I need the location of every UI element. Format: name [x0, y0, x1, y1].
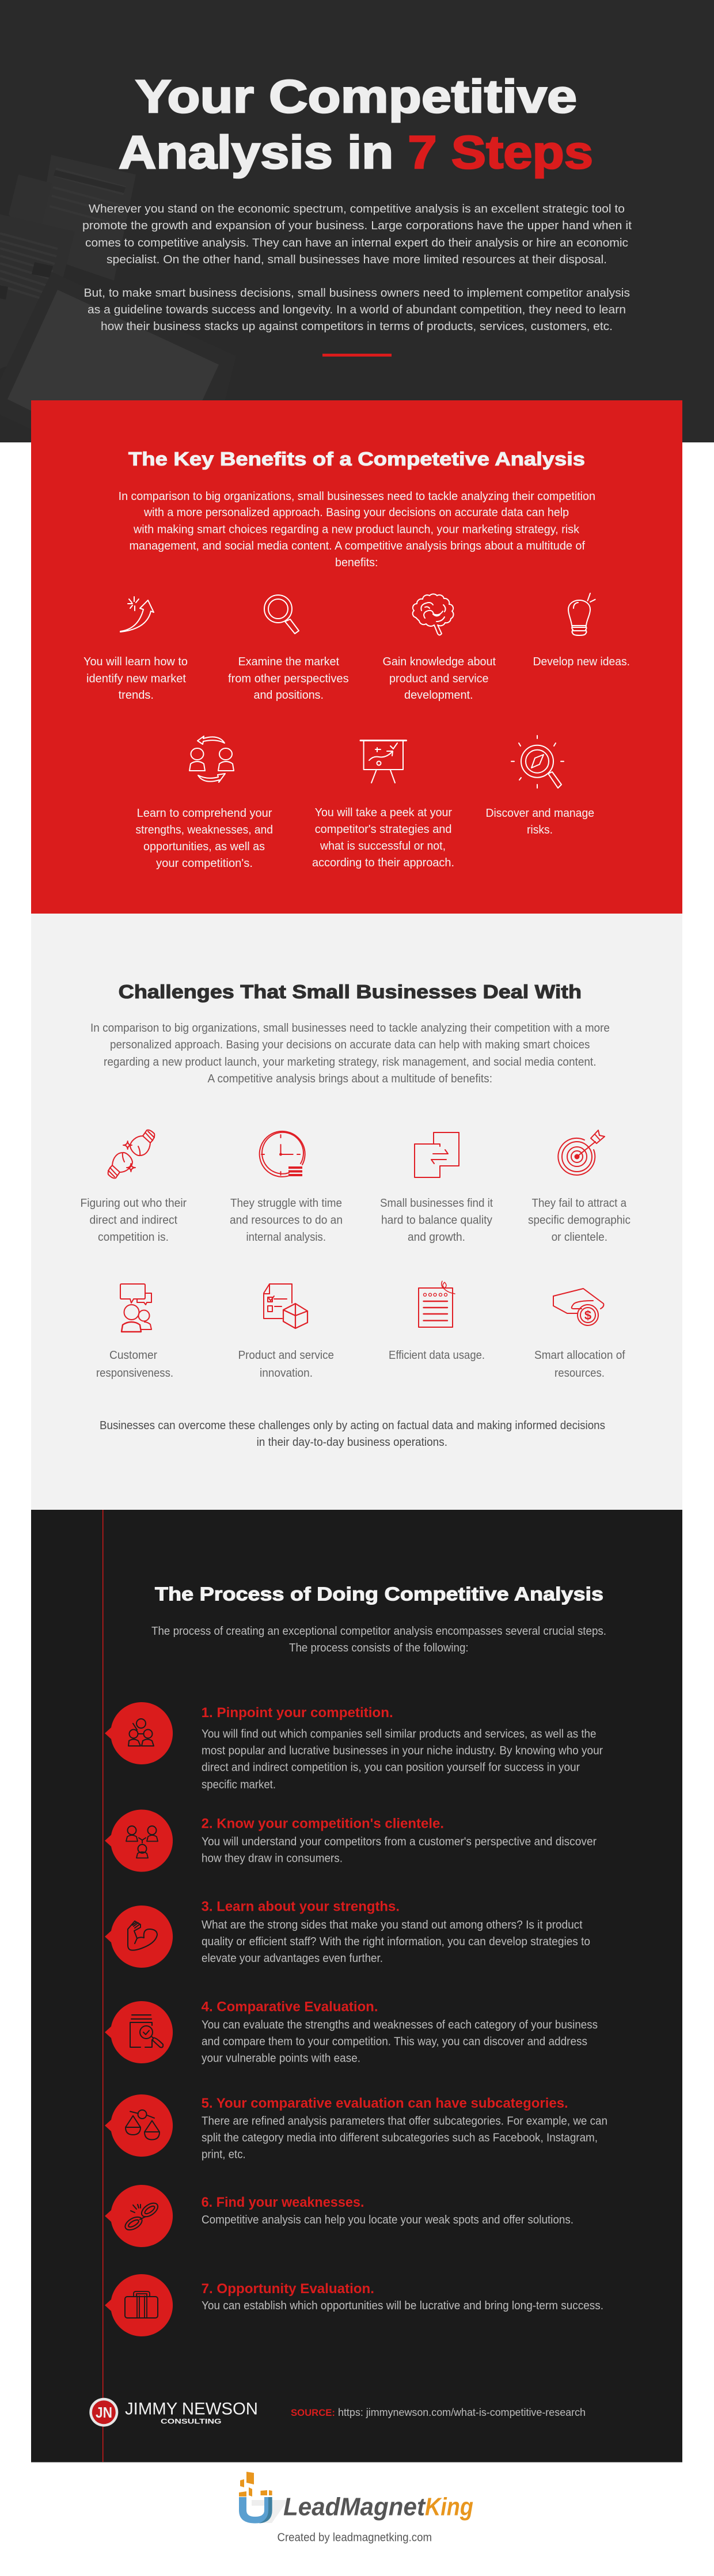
caption: peek	[312, 806, 454, 869]
icon: swapping documents	[415, 1132, 459, 1177]
source: https: jimmynewson.com/what-is-competitive-research	[338, 2407, 586, 2418]
step 7 text: 7. Opportunity Evaluation.	[202, 2281, 374, 2297]
caption: balance	[380, 1196, 493, 1244]
intro text	[82, 202, 632, 333]
caption: figuring out	[81, 1196, 187, 1244]
caption: balance: hard to balance quality	[381, 1213, 493, 1227]
closing text: in their day-to-day business operations.	[257, 1435, 447, 1449]
step 5 text: 5. Your comparative evaluation can have subcategories.	[202, 2096, 568, 2111]
title: Your Competitive	[135, 71, 577, 123]
intro text: promote the growth and expansion of your business. Large corporations have the upper hand when it	[82, 219, 632, 232]
icon: data sheet	[419, 1281, 455, 1327]
step 1 text: direct and indirect competition is, you can position yourself for success in your	[202, 1760, 580, 1774]
divider	[322, 354, 392, 357]
step 3 text: What are the strong sides that make you stand out among others? Is it product	[202, 1918, 583, 1931]
step 6 text: Competitive analysis can help you locate your weak spots and offer solutions.	[202, 2213, 574, 2226]
challenges intro text: In comparison to big organizations, small businesses need to tackle analyzing their competition with a more	[90, 1021, 610, 1035]
step 4 text: You can evaluate the strengths and weaknesses of each category of your business	[202, 2018, 598, 2031]
icon: boxing gloves	[108, 1130, 154, 1178]
step 1 text: most popular and lucrative businesses in your niche industry. By knowing who your	[202, 1744, 603, 1757]
icon: customer chat	[120, 1284, 151, 1332]
process intro text: The process consists of the following:	[289, 1641, 469, 1654]
caption: ideas: Develop new ideas.	[533, 655, 630, 668]
step 4 badge	[105, 2001, 173, 2063]
step 5 text: print, etc.	[202, 2147, 246, 2161]
intro text: But, to make smart business decisions, small business owners need to implement competitor analysis	[84, 286, 630, 300]
step 5 text: split the category media into different subcategories such as Facebook, Instagram,	[202, 2131, 598, 2144]
intro text: as a guideline towards success and longevity. In a world of abundant competition, they need to learn	[88, 303, 626, 316]
title	[119, 71, 593, 179]
icon: light bulb	[568, 593, 595, 635]
caption: resources: Smart allocation of	[534, 1348, 625, 1362]
step 4 text: your vulnerable points with ease.	[202, 2052, 360, 2064]
benefits intro text: with a more personalized approach. Basing your decisions on accurate data can help	[143, 506, 569, 519]
caption: trends: You will learn how to	[83, 655, 188, 668]
step 2 text: 2. Know your competition's clientele.	[202, 1816, 444, 1832]
step 7 text: You can establish which opportunities will be lucrative and bring long-term success.	[202, 2299, 603, 2312]
caption: customer responsiveness	[96, 1348, 173, 1380]
step 2 text	[202, 1816, 597, 1865]
logo: LeadMagnetKing	[239, 2472, 473, 2523]
caption: risks	[486, 806, 594, 836]
step 4 text	[202, 1999, 598, 2064]
logo: Jimmy Newson Consulting: JN	[96, 2404, 112, 2421]
caption: balance: Small businesses find it	[380, 1196, 493, 1210]
icon: product innovation	[264, 1284, 307, 1328]
step 6 text: 6. Find your weaknesses.	[202, 2195, 364, 2210]
step 1 text: You will find out which companies sell similar products and services, as well as the	[202, 1727, 597, 1741]
caption: knowledge: Gain knowledge about	[382, 655, 496, 668]
step 6 text	[202, 2195, 574, 2226]
caption: trends	[83, 655, 188, 702]
caption: comprehend	[136, 806, 273, 870]
icon: brain	[413, 594, 453, 635]
caption: customer responsiveness: responsiveness.	[96, 1366, 173, 1380]
step 1 text: specific market.	[202, 1778, 276, 1791]
caption: trends: identify new market	[86, 672, 186, 685]
caption: examine: and positions.	[253, 688, 324, 702]
icon: compass magnifier	[511, 736, 564, 788]
step 7 text	[202, 2281, 603, 2312]
icon: target	[558, 1130, 605, 1175]
caption: comprehend: your competition's.	[156, 857, 253, 870]
caption: customer responsiveness: Customer	[109, 1348, 157, 1362]
benefits intro text: benefits:	[335, 556, 378, 569]
intro text: comes to competitive analysis. They can have an internal expert do their analysis or hire an economic	[85, 236, 628, 249]
panel: challenges	[31, 914, 682, 1510]
caption: product innovation	[238, 1348, 334, 1380]
caption: demographic: specific demographic	[528, 1213, 631, 1227]
step 3 badge	[105, 1906, 173, 1968]
caption: knowledge: product and service	[389, 672, 488, 685]
step 3 text: 3. Learn about your strengths.	[202, 1899, 400, 1914]
caption: time: They struggle with time	[230, 1196, 342, 1210]
heading: challenges: Challenges That Small Businesses Deal With	[119, 981, 582, 1002]
challenges intro text: regarding a new product launch, your marketing strategy, risk management, and social media content.	[104, 1055, 597, 1069]
logo: Jimmy Newson Consulting	[89, 2398, 258, 2427]
closing text: Businesses can overcome these challenges only by acting on factual data and making informed decisions	[100, 1419, 605, 1432]
step 7 badge	[105, 2274, 173, 2336]
caption: balance: and growth.	[408, 1230, 465, 1244]
step 5 badge	[105, 2094, 173, 2157]
caption: resources	[534, 1348, 625, 1380]
credit: Created by leadmagnetking.com	[278, 2532, 432, 2544]
step 6 badge	[105, 2185, 173, 2247]
icon: magnifier	[264, 595, 299, 634]
caption: knowledge	[382, 655, 496, 702]
caption: figuring out: Figuring out who their	[81, 1196, 187, 1210]
process intro text	[151, 1624, 606, 1654]
caption: data usage: Efficient data usage.	[389, 1348, 485, 1362]
icon: hand with coin: $	[584, 1308, 591, 1323]
caption: time: internal analysis.	[246, 1230, 326, 1244]
caption: risks: risks.	[527, 823, 553, 836]
header background	[0, 0, 714, 442]
benefits intro text: with making smart choices regarding a new product launch, your marketing strategy, risk	[133, 523, 580, 536]
icon: clock	[260, 1131, 305, 1177]
step 2 text: how they draw in consumers.	[202, 1852, 343, 1865]
step 5 text	[202, 2096, 607, 2161]
timeline line	[102, 1510, 103, 2462]
challenges intro text: A competitive analysis brings about a multitude of benefits:	[207, 1072, 492, 1085]
step 4 text: and compare them to your competition. This way, you can discover and address	[202, 2035, 587, 2048]
step 2 badge	[105, 1810, 173, 1872]
caption: resources: resources.	[555, 1366, 605, 1380]
caption: knowledge: development.	[404, 688, 473, 702]
logo: Jimmy Newson Consulting: CONSULTING	[161, 2417, 222, 2425]
panel: process	[31, 1510, 682, 2463]
caption: peek: You will take a peek at your	[315, 806, 452, 819]
icon: trend arrow	[120, 597, 154, 632]
caption: trends: trends.	[119, 688, 154, 702]
step 1 badge	[105, 1702, 173, 1764]
step 3 text	[202, 1899, 590, 1965]
benefits intro text: management, and social media content. A competitive analysis brings about a multitude of	[129, 539, 585, 552]
icon: strategy board	[360, 741, 407, 783]
heading: benefits: The Key Benefits of a Competetive Analysis	[128, 448, 585, 469]
logo: Jimmy Newson Consulting: JIMMY NEWSON	[125, 2400, 258, 2419]
intro text: specialist. On the other hand, small businesses have more limited resources at their disposal.	[107, 253, 607, 266]
caption: examine	[228, 655, 349, 702]
intro text: Wherever you stand on the economic spectrum, competitive analysis is an excellent strategic tool to	[89, 202, 625, 215]
caption: peek: competitor's strategies and	[315, 823, 451, 836]
icon: people cycle	[189, 736, 234, 782]
caption: peek: according to their approach.	[312, 856, 454, 869]
step 1 text: 1. Pinpoint your competition.	[202, 1705, 393, 1721]
heading: process: The Process of Doing Competitive Analysis	[155, 1584, 603, 1605]
caption: product innovation: Product and service	[238, 1348, 334, 1362]
closing text	[100, 1419, 605, 1449]
caption: time: and resources to do an	[230, 1213, 343, 1227]
logo: LeadMagnetKing: King	[425, 2493, 473, 2521]
caption: figuring out: direct and indirect	[90, 1213, 177, 1227]
logo: LeadMagnetKing: LeadMagnet	[283, 2493, 426, 2521]
caption: figuring out: competition is.	[98, 1230, 169, 1244]
caption: peek: what is successful or not,	[320, 839, 446, 853]
panel: key benefits	[31, 400, 682, 914]
intro text: how their business stacks up against competitors in terms of products, services, customers, etc.	[101, 320, 613, 333]
challenges intro text: personalized approach. Basing your decisions on accurate data can help with making smart choices	[110, 1038, 590, 1051]
challenges intro text	[90, 1021, 610, 1085]
title: Analysis in 7 Steps	[119, 127, 593, 179]
step 1 text	[202, 1705, 603, 1791]
caption: product innovation: innovation.	[260, 1366, 313, 1380]
process intro text: The process of creating an exceptional competitor analysis encompasses several crucial steps.	[151, 1624, 606, 1638]
source: SOURCE:	[291, 2407, 335, 2418]
step 4 text: 4. Comparative Evaluation.	[202, 1999, 378, 2015]
benefits intro text	[119, 490, 595, 569]
caption: examine: Examine the market	[238, 655, 339, 668]
step 3 text: quality or efficient staff? With the right information, you can develop strategies to	[202, 1935, 590, 1948]
caption: risks: Discover and manage	[486, 806, 594, 820]
benefits intro text: In comparison to big organizations, small businesses need to tackle analyzing their competition	[119, 490, 595, 503]
step 5 text: There are refined analysis parameters that offer subcategories. For example, we can	[202, 2114, 607, 2127]
caption: time	[230, 1196, 343, 1244]
caption: comprehend: Learn to comprehend your	[137, 806, 272, 820]
caption: demographic	[528, 1196, 631, 1244]
step 3 text: elevate your advantages even further.	[202, 1952, 383, 1965]
caption: comprehend: strengths, weaknesses, and	[136, 823, 273, 836]
caption: demographic: or clientele.	[552, 1230, 607, 1244]
caption: comprehend: opportunities, as well as	[143, 840, 265, 853]
caption: examine: from other perspectives	[228, 672, 349, 685]
caption: demographic: They fail to attract a	[532, 1196, 627, 1210]
step 2 text: You will understand your competitors from a customer's perspective and discover	[202, 1835, 597, 1848]
icon: hand with coin	[553, 1289, 603, 1325]
